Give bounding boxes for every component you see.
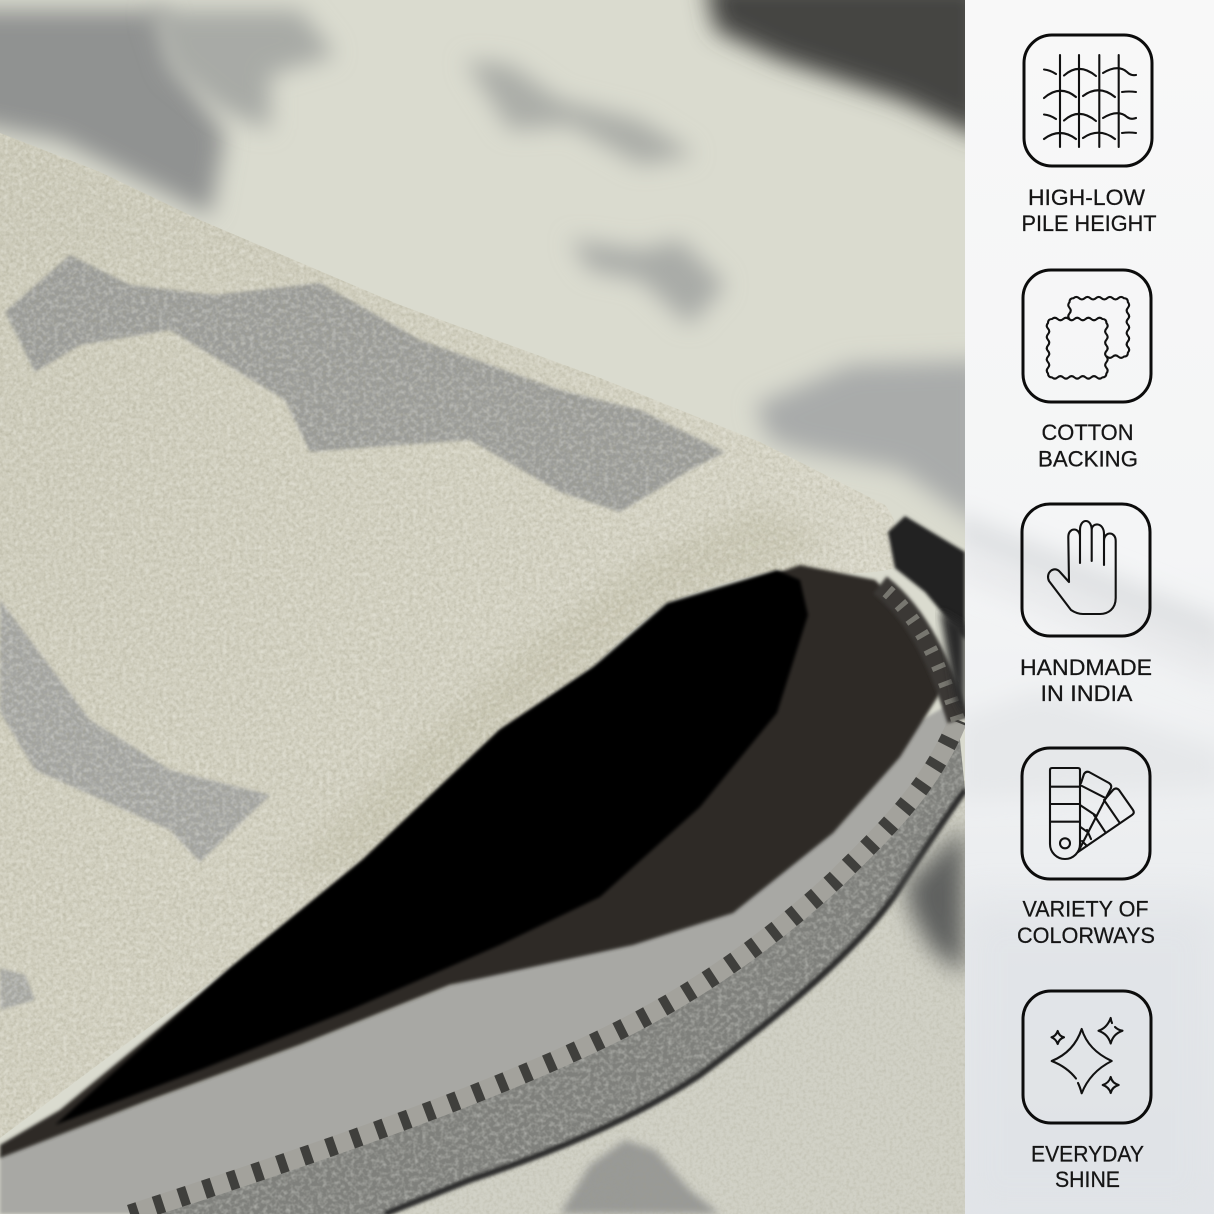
label: handmade in India — [1020, 655, 1152, 706]
icon: open hand — [1022, 504, 1150, 636]
label: variety of colorways — [1017, 896, 1155, 948]
feature: cotton backing — [1023, 270, 1151, 472]
backing: shaded knit area — [0, 565, 945, 1158]
label: handmade in India: HANDMADE — [1020, 655, 1152, 680]
grey pile band under the selvedge — [161, 740, 965, 1214]
feature: handmade in India — [1020, 504, 1152, 706]
icon: colour fan deck — [1022, 748, 1150, 879]
dark shadow under the band — [385, 790, 965, 1214]
blurred floor rug pattern — [0, 0, 985, 530]
label: everyday shine: EVERYDAY — [1031, 1142, 1144, 1166]
label: cotton backing: COTTON — [1042, 420, 1134, 445]
rug lip: cream pile surface — [0, 120, 920, 1140]
dark border patch on rug edge — [888, 516, 965, 640]
label: high-low pile height — [1022, 185, 1156, 236]
feature: high-low pile height — [1022, 35, 1156, 236]
label: cotton backing — [1038, 420, 1138, 472]
icon: sparkles — [1023, 991, 1151, 1123]
icon: fabric swatches — [1023, 270, 1151, 402]
lower grey motif — [0, 600, 270, 862]
label: variety of colorways: COLORWAYS — [1017, 923, 1155, 948]
label: cotton backing: BACKING — [1038, 446, 1138, 472]
label: variety of colorways: VARIETY OF — [1022, 896, 1148, 922]
lower rug surface — [380, 770, 965, 1214]
sidebar panel — [955, 0, 1214, 1214]
dark interior of the fold — [55, 570, 808, 1125]
label: everyday shine: SHINE — [1055, 1167, 1120, 1192]
label: everyday shine — [1031, 1142, 1144, 1192]
lower rug motif — [560, 1140, 720, 1214]
woven selvedge edge — [130, 585, 958, 1214]
label: high-low pile height: HIGH-LOW — [1028, 185, 1145, 210]
backing: light knit area — [0, 700, 958, 1214]
label: handmade in India: IN INDIA — [1040, 681, 1133, 706]
feature: everyday shine — [1023, 991, 1151, 1192]
feature: variety of colorways — [1017, 748, 1155, 948]
pile shading near the lip edge — [308, 508, 816, 867]
dark blotch at right of lower rug — [905, 825, 965, 975]
label: high-low pile height: PILE HEIGHT — [1022, 211, 1156, 236]
grey woven motif — [5, 255, 725, 512]
icon: woven pile grid — [1024, 35, 1152, 166]
